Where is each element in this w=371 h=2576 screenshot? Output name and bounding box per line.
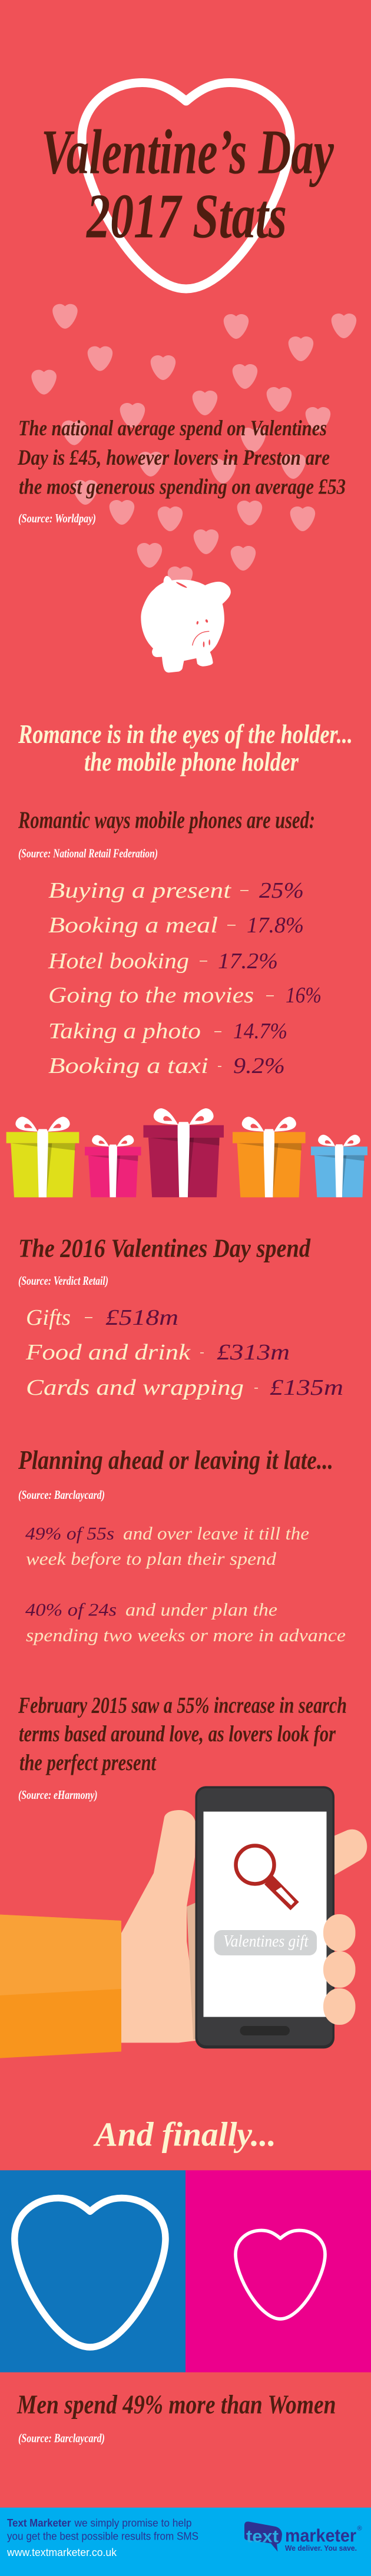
national average text	[17, 416, 346, 499]
icon: big heart	[15, 2198, 165, 2347]
text: planning stats: and over leave it till the	[123, 1523, 309, 1544]
text: February 2015: the perfect present	[19, 1750, 157, 1775]
finger behind phone	[330, 1829, 367, 1878]
source: Barclaycard: (Source: Barclaycard)	[18, 2431, 105, 2445]
logo	[244, 2521, 362, 2552]
list: mobile phone uses: Going to the movies	[48, 983, 254, 1008]
footer text	[6, 2517, 198, 2558]
falling hearts	[31, 304, 356, 591]
text: planning stats: spending two weeks or more in advance	[26, 1625, 346, 1645]
list: 2016 spend: Cards and wrapping	[26, 1375, 244, 1400]
panel: women	[186, 2170, 371, 2372]
list: mobile phone uses: Booking a meal	[48, 913, 218, 938]
palm shadow	[187, 1902, 196, 2040]
source: National Retail Federation: (Source: National Retail Federation)	[18, 846, 158, 860]
list: 2016 spend: £518m	[105, 1305, 178, 1330]
logo: marketer	[285, 2525, 356, 2546]
heading: Romance	[18, 719, 353, 777]
panel: men	[0, 2170, 186, 2372]
list: mobile phone uses: Buying a present	[48, 878, 232, 903]
list: mobile phone uses: Taking a photo	[48, 1019, 201, 1044]
icon: small heart	[236, 2231, 325, 2319]
list: 2016 spend: Food and drink	[25, 1340, 191, 1365]
search bar: Valentines gift	[223, 1932, 309, 1951]
logo: text	[246, 2527, 279, 2546]
heading: Romance: the mobile phone holder	[84, 747, 299, 777]
source: Worldpay: (Source: Worldpay)	[18, 511, 96, 525]
list: 2016 spend: £135m	[270, 1375, 343, 1400]
list: mobile phone uses: 17.8%	[247, 913, 304, 938]
footer text: www.textmarketer.co.uk	[6, 2546, 117, 2558]
source: Barclaycard: (Source: Barclaycard)	[18, 1488, 105, 1502]
icon: piggy bank	[141, 576, 231, 672]
text: February 2015	[18, 1692, 347, 1775]
logo: We deliver. You save.	[285, 2544, 357, 2552]
list: mobile phone uses: Hotel booking	[48, 949, 189, 974]
text: planning stats: 49% of 55s	[25, 1523, 114, 1544]
fingertips	[323, 1914, 356, 2025]
list: mobile phone uses: 14.7%	[233, 1019, 287, 1044]
heading: And finally: And finally...	[94, 2115, 276, 2153]
icon: magnifying glass	[236, 1846, 299, 1910]
text: planning stats: 40% of 24s	[25, 1599, 117, 1619]
phone	[196, 1786, 334, 2048]
list: mobile phone uses: 25%	[259, 878, 304, 903]
sleeve	[0, 1915, 121, 2058]
footer text: Text Marketer	[7, 2517, 71, 2529]
text: planning stats	[25, 1523, 346, 1645]
text: planning stats: week before to plan their spend	[26, 1548, 277, 1569]
title: 2017 Stats	[86, 182, 287, 252]
icon: large outline heart	[82, 82, 290, 289]
footer text: you get the best possible results from SMS	[7, 2530, 198, 2542]
footer	[0, 2508, 371, 2576]
footer text: we simply promise to help	[74, 2517, 192, 2529]
list: mobile phone uses: 17.2%	[218, 949, 278, 974]
list: mobile phone uses: Booking a taxi	[48, 1054, 208, 1078]
list: 2016 spend	[25, 1305, 343, 1400]
icon: five gift boxes	[6, 1108, 367, 1197]
heading: 2016 spend: The 2016 Valentines Day spend	[18, 1234, 311, 1262]
icon: hand holding phone	[0, 1786, 367, 2058]
title	[41, 118, 334, 252]
source: Verdict Retail: (Source: Verdict Retail)	[18, 1274, 108, 1288]
list: 2016 spend: £313m	[217, 1340, 290, 1365]
search bar	[214, 1930, 317, 1955]
logo: ®	[357, 2525, 362, 2532]
text: planning stats: and under plan the	[125, 1599, 277, 1619]
list: mobile phone uses	[48, 878, 322, 1078]
list: mobile phone uses: 16%	[286, 983, 322, 1008]
list: 2016 spend: Gifts	[26, 1305, 71, 1330]
hand and thumb	[121, 1810, 200, 2042]
source: eHarmony: (Source: eHarmony)	[18, 1788, 98, 1802]
list: mobile phone uses: 9.2%	[233, 1054, 285, 1078]
